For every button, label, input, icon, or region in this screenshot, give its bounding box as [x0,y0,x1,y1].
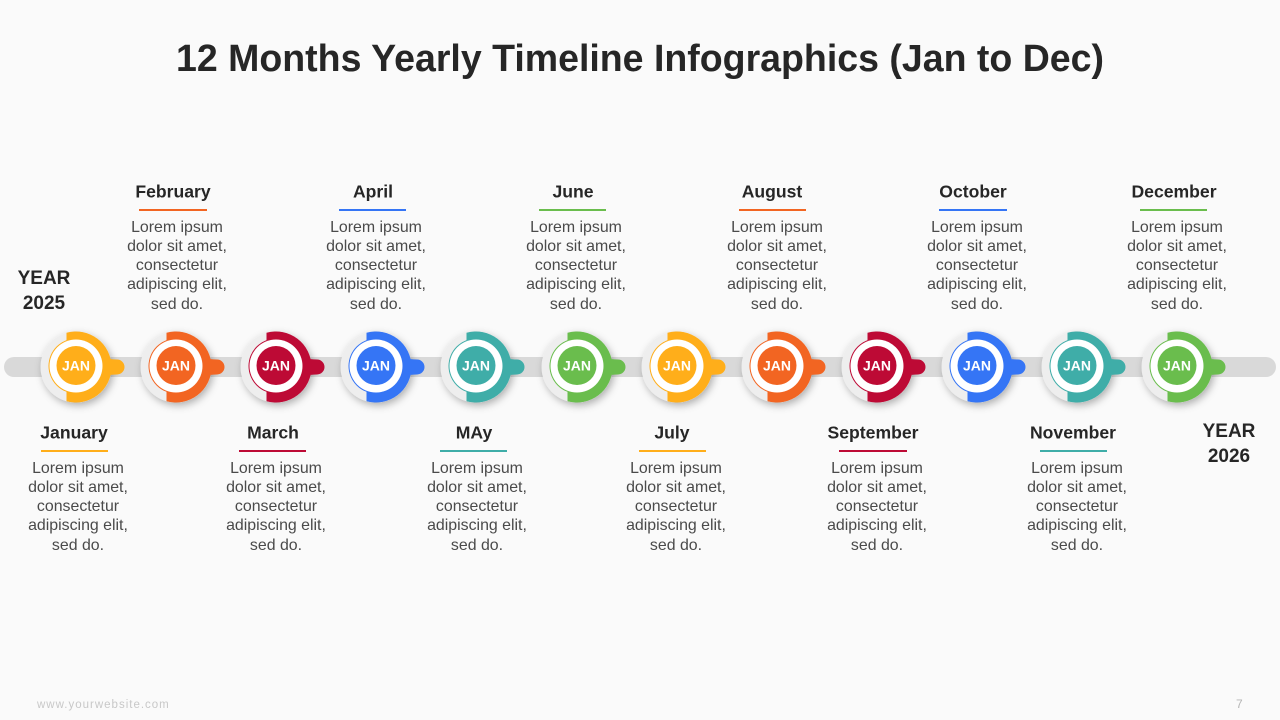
marker: September [842,332,926,402]
marker: June: JAN [563,358,591,374]
text block: April: Lorem ipsum [330,219,422,236]
text block: October: October [939,182,1007,202]
text block: September [827,422,927,554]
text block: February: February [135,182,211,202]
footer website: www.yourwebsite.com [36,699,170,711]
text block: June: June [552,182,594,202]
text block: May [427,422,527,554]
text block: June: consectetur [535,257,618,274]
text block: November: adipiscing elit, [1027,517,1127,534]
marker: March [240,332,324,402]
text block: February: consectetur [136,257,219,274]
year label: 2026 [1203,421,1256,467]
text block: June: sed do. [550,296,602,313]
text block: January [28,422,128,554]
text block: January: January [40,422,108,442]
marker: April: JAN [362,358,390,374]
marker: July [642,332,726,402]
text block: November [1027,422,1127,554]
text block: September: adipiscing elit, [827,517,927,534]
text block: September: sed do. [851,537,903,554]
text block: July: Lorem ipsum [630,460,722,477]
text block: June [526,182,626,313]
text block: November: dolor sit amet, [1027,479,1127,496]
marker: December [1142,332,1226,402]
text block: September: September [828,422,919,442]
text block: July: dolor sit amet, [626,479,726,496]
text block: December: Lorem ipsum [1131,219,1223,236]
text block: July: sed do. [650,537,702,554]
text block: December: dolor sit amet, [1127,238,1227,255]
text block: December: consectetur [1136,257,1219,274]
year label: 2026: YEAR [1203,421,1256,442]
text block: August: dolor sit amet, [727,238,827,255]
text block: April [326,182,426,313]
marker: January: JAN [62,358,90,374]
text block: February: Lorem ipsum [131,219,223,236]
text block: October: dolor sit amet, [927,238,1027,255]
text block: August: Lorem ipsum [731,219,823,236]
marker: January [40,332,125,402]
text block: October: adipiscing elit, [927,276,1027,293]
marker: October: JAN [963,358,991,374]
text block: January: sed do. [52,537,104,554]
text block: July: adipiscing elit, [626,517,726,534]
text block: September: consectetur [836,498,919,515]
text block: November: Lorem ipsum [1031,460,1123,477]
text block: August: consectetur [736,257,819,274]
text block: September: dolor sit amet, [827,479,927,496]
text block: May: dolor sit amet, [427,479,527,496]
title: 12 Months Yearly Timeline Infographics (Jan to Dec) [176,38,1104,80]
text block: May: consectetur [436,498,519,515]
text block: April: dolor sit amet, [326,238,426,255]
text block: October: Lorem ipsum [931,219,1023,236]
text block: March: consectetur [235,498,318,515]
text block: January: dolor sit amet, [28,479,128,496]
text block: March: dolor sit amet, [226,479,326,496]
marker: October [942,332,1026,402]
text block: January: adipiscing elit, [28,517,128,534]
text block: March: Lorem ipsum [230,460,322,477]
text block: September: Lorem ipsum [831,460,923,477]
text block: May: sed do. [451,537,503,554]
text block: May: MAy [456,422,492,442]
marker: August [742,332,826,402]
marker: May [440,332,524,402]
marker: September: JAN [863,358,891,374]
text block: April: consectetur [335,257,418,274]
text block: March: adipiscing elit, [226,517,326,534]
text block: May: Lorem ipsum [431,460,523,477]
timeline bar [4,357,1276,377]
text block: November: sed do. [1051,537,1103,554]
text block: May: adipiscing elit, [427,517,527,534]
marker: August: JAN [763,358,791,374]
marker: December: JAN [1163,358,1191,374]
text block: April: adipiscing elit, [326,276,426,293]
text block: February [127,182,227,313]
marker: November: JAN [1063,358,1091,374]
text block: April: sed do. [350,296,402,313]
text block: December: December [1131,182,1217,202]
text block: March: sed do. [250,537,302,554]
text block: October [927,182,1027,313]
text block: June: dolor sit amet, [526,238,626,255]
marker: June [542,332,626,402]
text block: July [626,422,726,554]
marker: February [140,332,224,402]
marker: November [1042,332,1126,402]
marker: May: JAN [462,358,490,374]
marker: February: JAN [162,358,190,374]
marker: April [340,332,424,402]
text block: December: sed do. [1151,296,1203,313]
text block: November: consectetur [1036,498,1119,515]
text block: March: March [247,422,299,442]
text block: December: adipiscing elit, [1127,276,1227,293]
text block: February: sed do. [151,296,203,313]
text block: July: consectetur [635,498,718,515]
text block: January: consectetur [37,498,120,515]
marker: March: JAN [262,358,290,374]
text block: January: Lorem ipsum [32,460,124,477]
text block: August: adipiscing elit, [727,276,827,293]
text block: October: sed do. [951,296,1003,313]
text block: June: Lorem ipsum [530,219,622,236]
text block: August [727,182,827,313]
text block: December [1127,182,1227,313]
year label: 2026: 2026 [1208,446,1250,467]
text block: July: July [654,422,690,442]
year label: 2025: 2025 [23,293,66,314]
text block: April: April [353,182,393,202]
year label: 2025 [18,268,71,314]
text block: March [226,422,326,554]
year label: 2025: YEAR [18,268,71,289]
text block: November: November [1030,422,1116,442]
marker: July: JAN [663,358,691,374]
text block: February: dolor sit amet, [127,238,227,255]
text block: February: adipiscing elit, [127,276,227,293]
page number: 7 [1236,697,1243,711]
text block: June: adipiscing elit, [526,276,626,293]
text block: October: consectetur [936,257,1019,274]
text block: August: sed do. [751,296,803,313]
text block: August: August [742,182,802,202]
